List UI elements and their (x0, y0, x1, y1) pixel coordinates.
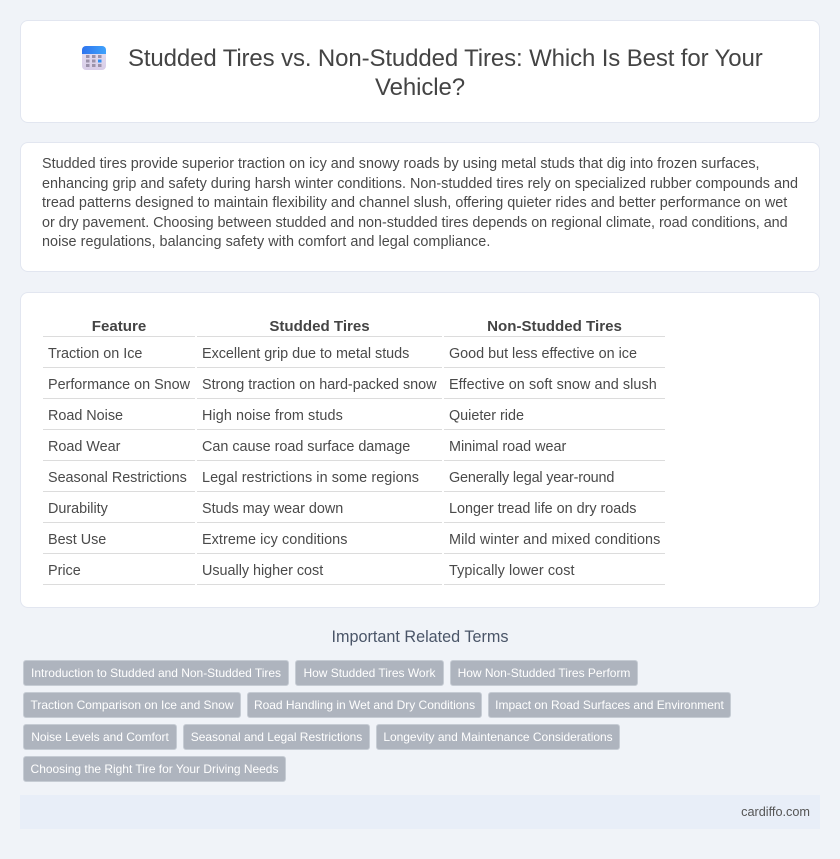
tag (23, 660, 289, 686)
tag: Introduction to Studded and Non-Studded Tires (31, 666, 281, 680)
intro text: tread patterns designed to maintain flexibility and channel slush, offering quieter rides and better performance on wet (42, 195, 787, 211)
related terms tags (23, 660, 731, 782)
row: traction on ice: Traction on Ice (48, 346, 142, 362)
table header: Studded Tires (269, 318, 370, 335)
row: road noise (48, 408, 524, 424)
row: best use: Mild winter and mixed conditions (449, 532, 660, 548)
title: Vehicle? (375, 74, 465, 101)
comparison table (43, 318, 665, 585)
intro text: noise regulations, balancing safety with comfort and legal compliance. (42, 234, 490, 250)
tag: How Studded Tires Work (303, 666, 436, 680)
row: road noise: Quieter ride (449, 408, 524, 424)
tag: Noise Levels and Comfort (31, 730, 169, 744)
row: seasonal restrictions (48, 470, 614, 486)
row: performance on snow (48, 377, 657, 393)
row: seasonal restrictions: Legal restrictions in some regions (202, 470, 419, 486)
row: durability: Durability (48, 501, 108, 517)
row: road wear: Minimal road wear (449, 439, 566, 455)
row: road wear: Can cause road surface damage (202, 439, 410, 455)
row: seasonal restrictions: Generally legal year-round (449, 470, 614, 486)
footer bar (20, 795, 820, 829)
heading: important related terms: Important Related Terms (332, 628, 508, 646)
tag (488, 692, 731, 718)
table header (92, 318, 622, 335)
tag (450, 660, 638, 686)
title: Studded Tires vs. Non-Studded Tires: Which Is Best for Your (128, 45, 763, 72)
panel: comparison table (20, 292, 820, 608)
panel: intro paragraph (20, 142, 820, 272)
row: road wear: Road Wear (48, 439, 120, 455)
row: traction on ice: Excellent grip due to metal studs (202, 346, 409, 362)
intro text: enhancing grip and safety during harsh winter conditions. Non-studded tires rely on specialized rubber compounds and (42, 176, 798, 192)
row: performance on snow: Strong traction on hard-packed snow (202, 377, 436, 393)
row: performance on snow: Performance on Snow (48, 377, 190, 393)
row: price (48, 563, 575, 579)
tag: How Non-Studded Tires Perform (458, 666, 630, 680)
row: performance on snow: Effective on soft snow and slush (449, 377, 657, 393)
row: traction on ice (48, 346, 637, 362)
tag (23, 756, 286, 782)
intro text (42, 156, 798, 250)
row: best use: Best Use (48, 532, 106, 548)
intro text: Studded tires provide superior traction on icy and snowy roads by using metal studs that dig into frozen surfaces, (42, 156, 760, 172)
tag (23, 724, 177, 750)
tag (295, 660, 444, 686)
row: road noise: High noise from studs (202, 408, 343, 424)
title (128, 45, 763, 101)
row: durability: Studs may wear down (202, 501, 343, 517)
row: traction on ice: Good but less effective on ice (449, 346, 637, 362)
icon: calendar (82, 46, 106, 70)
row: price: Price (48, 563, 81, 579)
row: price: Typically lower cost (449, 563, 575, 579)
tag (183, 724, 370, 750)
row: best use (48, 532, 660, 548)
row: road wear (48, 439, 566, 455)
footer source: cardiffo.com (741, 805, 810, 819)
tag: Impact on Road Surfaces and Environment (495, 698, 724, 712)
row: road noise: Road Noise (48, 408, 123, 424)
row: durability: Longer tread life on dry roads (449, 501, 636, 517)
tag (376, 724, 620, 750)
tag: Road Handling in Wet and Dry Conditions (254, 698, 475, 712)
tag (23, 692, 241, 718)
row: price: Usually higher cost (202, 563, 323, 579)
tag: Traction Comparison on Ice and Snow (31, 698, 233, 712)
tag: Choosing the Right Tire for Your Driving Needs (31, 762, 278, 776)
tag: Longevity and Maintenance Considerations (383, 730, 613, 744)
row: seasonal restrictions: Seasonal Restrictions (48, 470, 187, 486)
tag: Seasonal and Legal Restrictions (191, 730, 362, 744)
intro text: or dry pavement. Choosing between studded and non-studded tires depends on regional climate, road conditions, and (42, 214, 788, 230)
row: best use: Extreme icy conditions (202, 532, 348, 548)
header panel (20, 20, 820, 123)
table header: Feature (92, 318, 146, 335)
row: durability (48, 501, 636, 517)
table header: Non-Studded Tires (487, 318, 622, 335)
tag (247, 692, 482, 718)
